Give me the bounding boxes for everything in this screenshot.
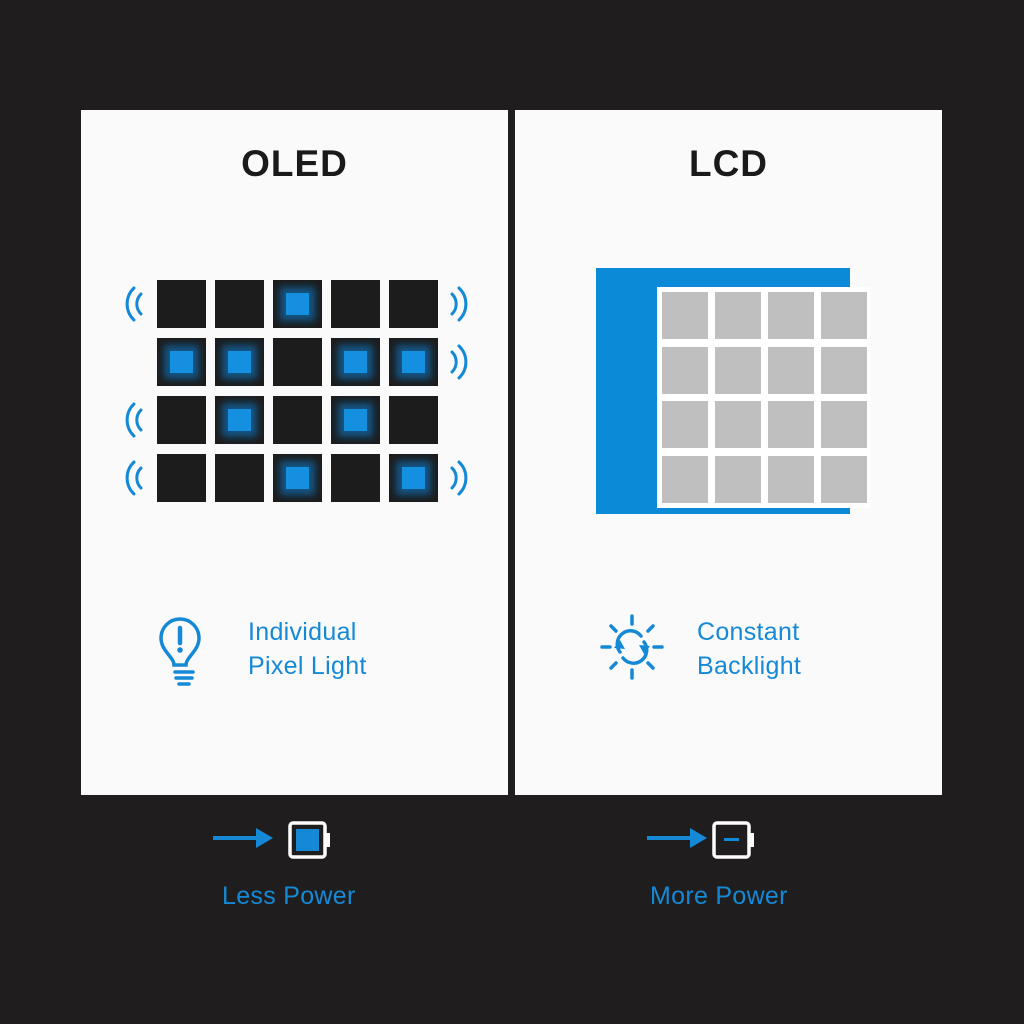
icon: arrow + full battery — [213, 821, 330, 859]
icon: arrow + low battery — [647, 821, 754, 859]
icon: sun with cycle arrows — [600, 614, 664, 680]
label: Individual Pixel Light: Individual — [248, 618, 357, 646]
icon: light bulb — [159, 617, 201, 686]
panel: LCD — [515, 110, 942, 795]
label: Individual Pixel Light — [248, 618, 367, 680]
heading: LCD: LCD — [689, 143, 768, 184]
heading: OLED: OLED — [241, 143, 348, 184]
label: Individual Pixel Light: Pixel Light — [248, 652, 367, 680]
icon: waves — [127, 288, 466, 494]
label: Less Power: Less Power — [222, 882, 356, 910]
label: More Power: More Power — [650, 882, 788, 910]
label: Constant Backlight: Constant — [697, 618, 799, 646]
label: Constant Backlight: Backlight — [697, 652, 801, 680]
panel: OLED — [81, 110, 508, 795]
label: Constant Backlight — [697, 618, 801, 680]
